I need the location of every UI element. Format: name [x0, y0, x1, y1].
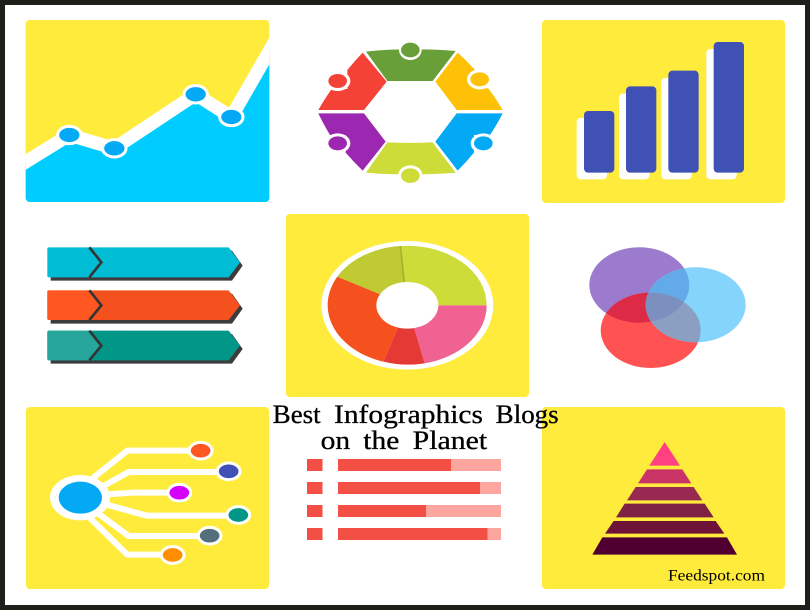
slice: lime [400, 246, 487, 305]
slice: olive [337, 246, 407, 305]
row 2 [307, 482, 501, 494]
slice: red [383, 305, 425, 365]
panel: arrow banners [47, 247, 243, 364]
segment: amber [435, 53, 503, 110]
banner: orange [47, 290, 243, 324]
bars [584, 42, 744, 173]
slice: pink [407, 305, 487, 363]
segment: blue [435, 113, 503, 171]
overlap: purple and red [606, 292, 651, 323]
brand label: Feedspot.com [668, 568, 766, 584]
connectors [80, 451, 238, 555]
circle: red [601, 293, 701, 368]
segment: green [366, 40, 456, 81]
panel: puzzle ring [318, 40, 503, 185]
row 3 [307, 505, 501, 517]
banner: cyan [47, 247, 243, 281]
hub [50, 475, 110, 520]
bar shadows [577, 49, 737, 179]
segment: red [318, 53, 387, 110]
panel: pyramid [542, 407, 785, 589]
title: Planet [413, 426, 488, 455]
panel: venn diagram [589, 247, 746, 368]
donut outer ring [321, 241, 493, 370]
segment: purple [318, 113, 386, 171]
overlap: blue and purple [646, 268, 690, 322]
panel: bar chart [542, 20, 785, 203]
slice: orange [328, 277, 407, 362]
donut hole [376, 282, 438, 329]
overlap: blue and red [646, 292, 701, 342]
panel: line chart [26, 20, 270, 202]
title: Infographics [334, 400, 483, 429]
circle: purple [589, 247, 689, 323]
circle: light blue [646, 267, 746, 342]
title: the [363, 426, 399, 455]
panel: horizontal bars [307, 459, 501, 540]
title: on [321, 426, 350, 455]
data points [58, 86, 243, 157]
overlap: all three [646, 292, 684, 322]
nodes [161, 442, 250, 563]
title: Best [273, 400, 321, 429]
segment: lime [366, 142, 456, 185]
panel: donut chart [286, 214, 529, 397]
banner: teal [47, 331, 243, 364]
title: Blogs [496, 400, 559, 429]
row 1 [307, 459, 501, 471]
panel: network diagram [26, 407, 269, 589]
title [273, 400, 559, 455]
row 4 [307, 528, 501, 540]
